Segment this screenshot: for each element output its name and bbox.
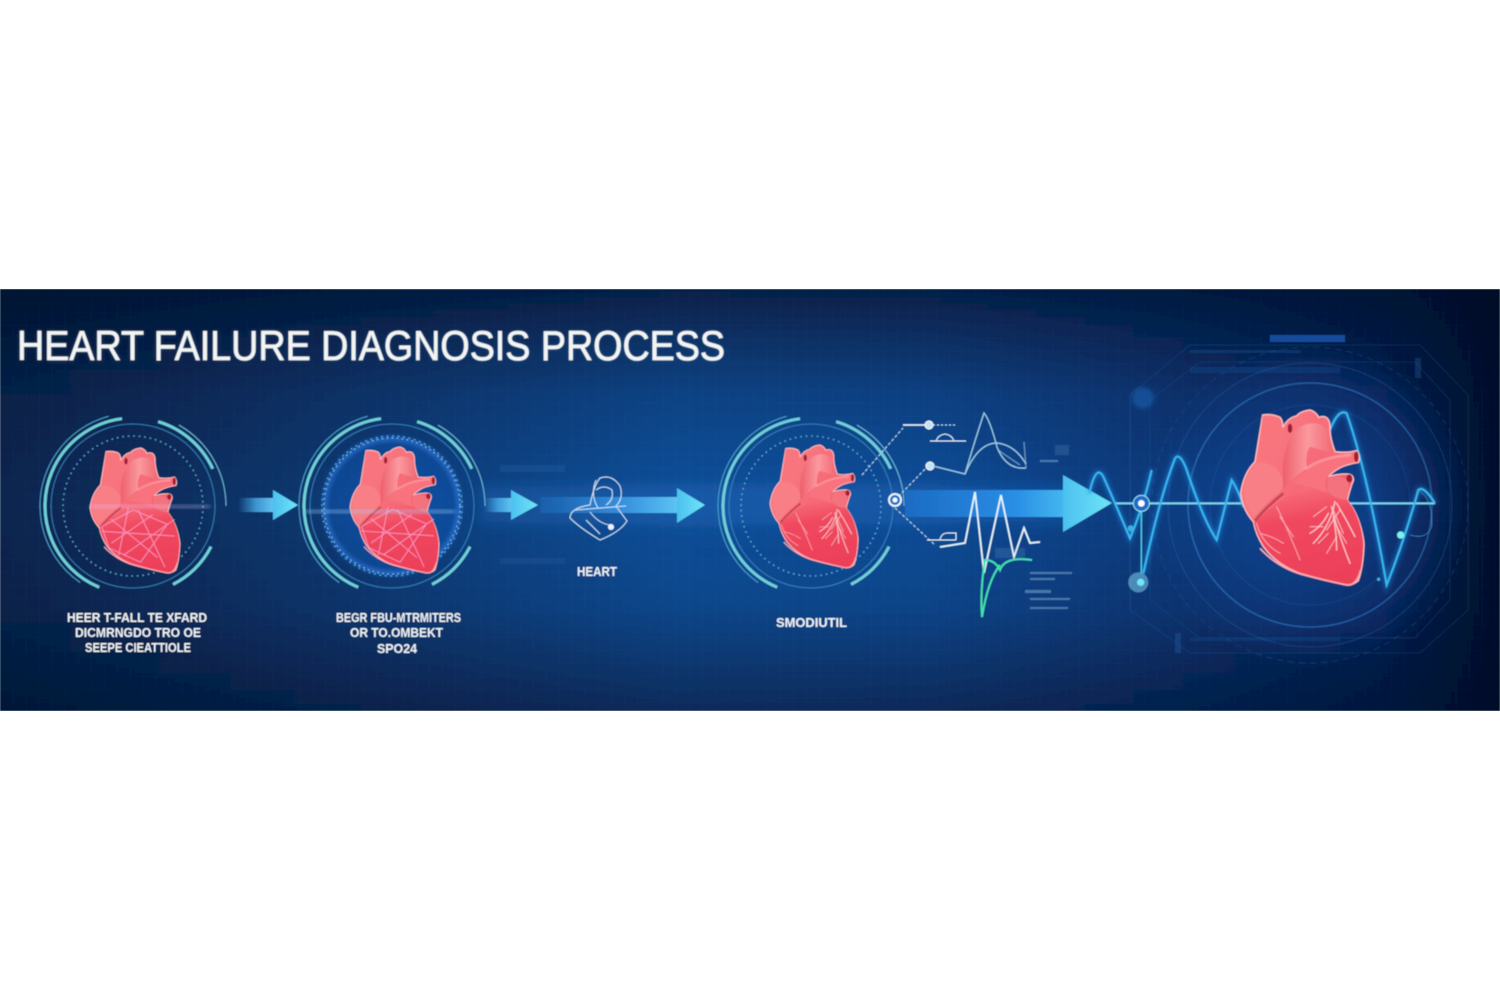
label: step 1 bbox=[67, 610, 207, 655]
label: heart: HEART bbox=[577, 564, 617, 579]
mini data blocks bbox=[995, 445, 1072, 609]
step 3: heart ring bbox=[681, 376, 941, 636]
banner background bbox=[0, 289, 1500, 711]
label: step 2 bbox=[336, 610, 461, 656]
waveform charts bbox=[862, 413, 1072, 617]
label: step 1: HEER T-FALL TE XFARD bbox=[67, 610, 207, 625]
step 2 ring bbox=[262, 376, 522, 636]
green trace bbox=[981, 559, 1032, 617]
step 2: heart scan with blue disc bbox=[262, 376, 522, 636]
step 3 ring bbox=[681, 376, 941, 636]
infographic banner bbox=[0, 289, 1500, 711]
step 1: heart scan bbox=[3, 376, 263, 636]
title: HEART FAILURE DIAGNOSIS PROCESS bbox=[17, 322, 725, 369]
icon: heart outline sketch bbox=[570, 477, 627, 540]
ecg trace bbox=[940, 492, 1040, 573]
step 1 ring bbox=[3, 376, 263, 636]
step 2 blue disc bbox=[318, 432, 466, 580]
label: step 2: OR TO.OMBEKT bbox=[350, 625, 443, 640]
step 4: large heart bbox=[1241, 410, 1364, 585]
step 1 heart bbox=[90, 448, 180, 573]
label: step 2: BEGR FBU-MTRMITERS bbox=[336, 610, 461, 625]
right panel: technical rings backdrop bbox=[1130, 335, 1475, 670]
arrow 4 bbox=[905, 475, 1112, 532]
upper curves bbox=[933, 413, 1026, 474]
title: HEART FAILURE DIAGNOSIS PROCESS bbox=[17, 322, 725, 369]
step 1 glow line bbox=[90, 505, 210, 508]
step 2 glow line bbox=[305, 510, 455, 513]
connector lines and nodes bbox=[862, 421, 966, 545]
step 3 heart bbox=[770, 445, 858, 568]
arrow 3 bbox=[540, 488, 705, 523]
arrow 2 bbox=[484, 490, 538, 520]
label: step 1: SEEPE CIEATTIOLE bbox=[85, 640, 191, 655]
label: step 1: DICMRNGDO TRO OE bbox=[75, 625, 201, 640]
label: step 2: SPO24 bbox=[377, 641, 418, 656]
label: step 3: SMODIUTIL bbox=[776, 615, 847, 630]
arrow 1 bbox=[238, 490, 298, 520]
pulse wave bbox=[1089, 412, 1435, 592]
step 2 heart bbox=[350, 447, 439, 573]
